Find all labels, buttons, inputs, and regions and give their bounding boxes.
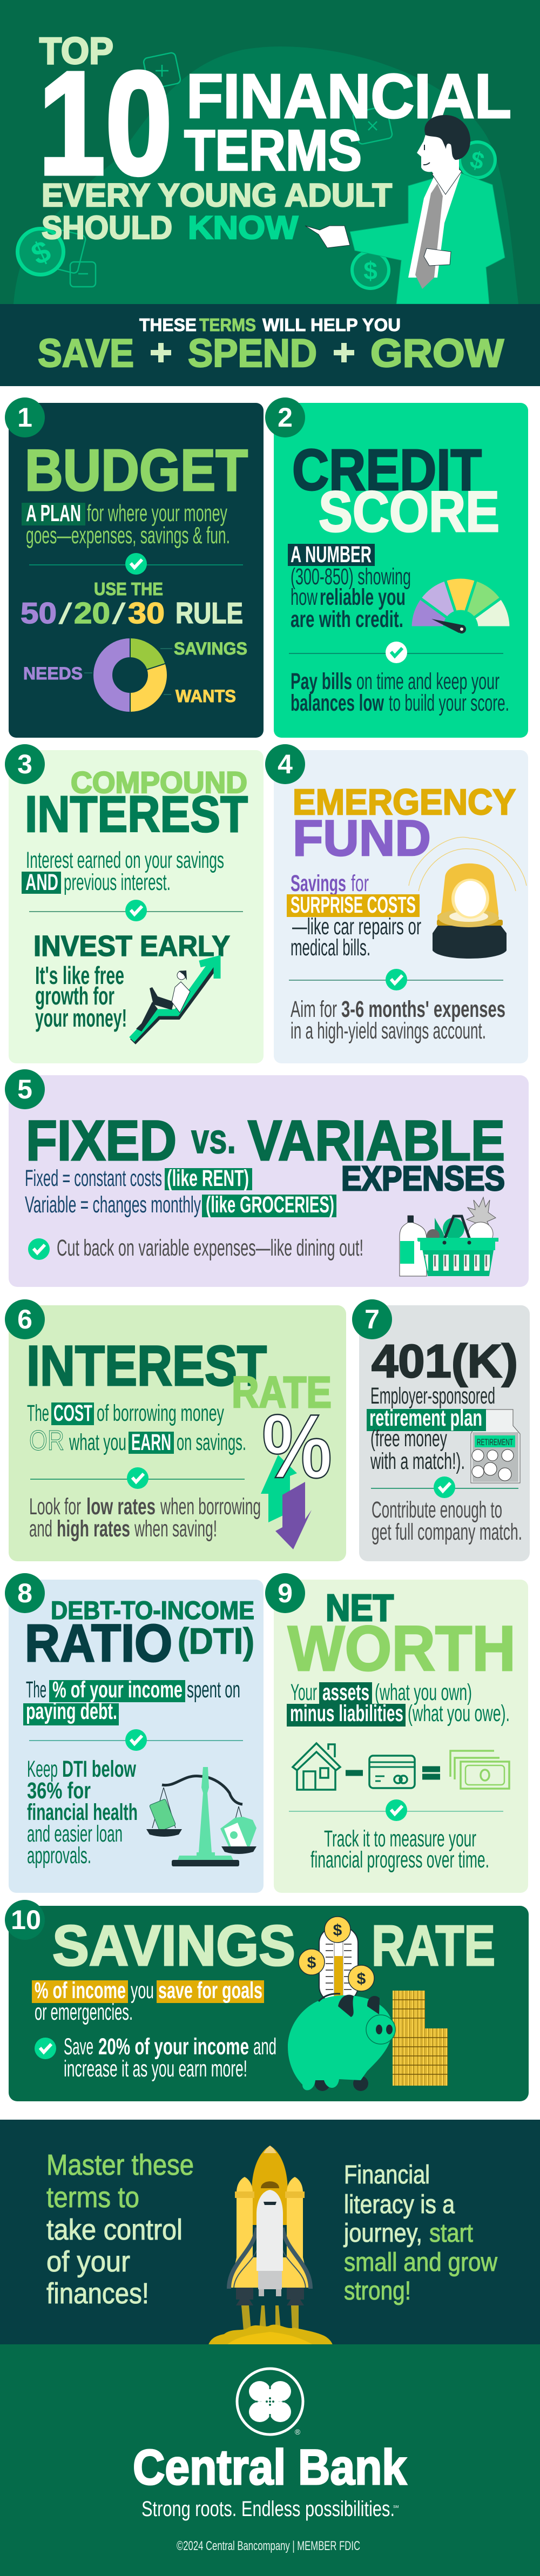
panel 5: fixed vs variable expenses xyxy=(5,1069,529,1287)
badge 10 xyxy=(5,1900,45,1940)
tip xyxy=(64,2034,276,2082)
panel 2: credit score xyxy=(265,397,528,738)
icon: percent with arrows xyxy=(261,1395,332,1549)
icon: dollar coins: $ xyxy=(363,257,377,285)
definitions: Variable = changes monthly xyxy=(25,1192,201,1218)
heading: FUND xyxy=(293,810,431,866)
definition: save for goals xyxy=(158,1978,262,2004)
badge 4 xyxy=(265,744,305,784)
definition: spent on xyxy=(187,1677,240,1703)
heading: FIXED xyxy=(26,1109,177,1172)
credit gauge xyxy=(410,577,511,633)
left message: finances! xyxy=(46,2277,149,2310)
icon: check xyxy=(386,969,407,990)
right message xyxy=(343,2161,497,2305)
invest early text: growth for xyxy=(35,982,114,1010)
definition: retirement plan xyxy=(369,1405,482,1431)
definition: A PLAN xyxy=(26,500,81,527)
tip: approvals. xyxy=(27,1843,91,1869)
icons: house minus card equals money xyxy=(293,1743,509,1790)
illustration: retirement jar xyxy=(471,1410,520,1483)
illustration: emergency siren xyxy=(409,837,526,959)
save spend grow words: SPEND xyxy=(188,332,317,375)
definition xyxy=(23,1677,240,1725)
illustration: thermometer, coins and piggy bank: $ xyxy=(357,1970,366,1988)
badge 6 xyxy=(5,1299,45,1339)
right message: strong! xyxy=(344,2277,411,2305)
tip: 36% for xyxy=(27,1778,91,1804)
definitions: Fixed = constant costs xyxy=(25,1165,162,1191)
heading: EMERGENCY xyxy=(293,782,516,822)
badge 9: 9 xyxy=(278,1578,293,1608)
definition: % of income xyxy=(35,1978,126,2004)
definition: assets xyxy=(322,1680,369,1705)
heading xyxy=(292,437,500,544)
copyright: ©2024 Central Bancompany | MEMBER FDIC xyxy=(177,2539,360,2553)
badge 7 xyxy=(352,1299,392,1339)
hill background shape xyxy=(14,46,518,304)
tip xyxy=(291,996,505,1044)
right message: journey, xyxy=(343,2219,422,2248)
badge 4: 4 xyxy=(278,749,293,779)
definition: A NUMBER xyxy=(291,542,372,568)
definition: for xyxy=(351,871,369,896)
rule heading xyxy=(21,579,243,630)
right message: literacy is a xyxy=(344,2190,455,2219)
tip xyxy=(372,1497,522,1545)
panel 3: compound interest xyxy=(5,744,264,1063)
definition: Interest earned on your savings xyxy=(26,847,224,873)
definition: OR xyxy=(29,1425,64,1456)
panel 4: emergency fund xyxy=(265,744,528,1063)
definition: on savings. xyxy=(177,1429,246,1455)
heading: INTEREST xyxy=(25,786,248,843)
rule heading: 50 xyxy=(21,596,57,630)
save spend grow words: GROW xyxy=(370,332,504,375)
illustration: thermometer, coins and piggy bank: $ xyxy=(333,1921,342,1939)
definition xyxy=(22,847,224,895)
definition xyxy=(27,1400,246,1456)
definition xyxy=(22,500,230,549)
definition: The xyxy=(27,1400,49,1426)
heading: RATE xyxy=(372,1914,495,1978)
heading xyxy=(52,1914,495,1978)
heading: EXPENSES xyxy=(341,1159,505,1198)
definition: how xyxy=(291,584,318,610)
heading: 401(K) xyxy=(372,1336,518,1387)
panel 9: net worth xyxy=(265,1573,528,1893)
badge 7: 7 xyxy=(364,1304,380,1334)
definition: (what you own) xyxy=(375,1680,472,1705)
right message: Financial xyxy=(344,2161,430,2189)
invest early text xyxy=(35,961,127,1032)
badge 6: 6 xyxy=(17,1304,32,1334)
rule heading: RULE xyxy=(176,596,243,630)
definition xyxy=(287,1680,510,1727)
left message: Master these xyxy=(46,2149,194,2181)
icon: dollar coins: $ xyxy=(26,233,56,271)
illustration: businessman pointing xyxy=(305,115,505,304)
footer: Central Bank xyxy=(0,2344,540,2576)
badge 8 xyxy=(5,1573,45,1613)
icon: check xyxy=(127,1467,148,1489)
tip: and xyxy=(253,2034,276,2060)
heading: DEBT-TO-INCOME xyxy=(51,1596,254,1624)
badge 9 xyxy=(265,1573,305,1613)
icon: check xyxy=(35,2038,56,2059)
tip: and easier loan xyxy=(27,1821,123,1847)
tip: financial health xyxy=(27,1799,138,1825)
definitions: (like GROCERIES) xyxy=(206,1192,334,1218)
heading xyxy=(25,765,248,843)
banner: save, spend, grow xyxy=(0,304,540,386)
definition xyxy=(288,542,411,632)
definition: medical bills. xyxy=(291,935,370,961)
definition: (free money xyxy=(370,1426,447,1452)
tip: increase it as you earn more! xyxy=(64,2056,247,2082)
subheading xyxy=(139,315,401,335)
definition: reliable you xyxy=(320,584,406,610)
icon: check xyxy=(125,553,147,575)
definition: of borrowing money xyxy=(97,1400,224,1426)
badge 5: 5 xyxy=(17,1074,32,1104)
definition: with a match!). xyxy=(370,1448,465,1474)
definitions xyxy=(25,1165,336,1218)
donut chart xyxy=(84,638,172,712)
icon: dollar coins: $ xyxy=(467,146,487,175)
icon: check xyxy=(386,642,407,663)
badge 3 xyxy=(5,744,45,784)
subheading: WILL HELP YOU xyxy=(262,315,401,335)
left message: terms to xyxy=(46,2181,139,2214)
heading: CREDIT xyxy=(292,437,482,502)
heading: VARIABLE xyxy=(248,1109,505,1172)
tip: Save xyxy=(64,2034,93,2060)
illustration: person relaxing on rising arrow xyxy=(132,960,217,1042)
rule heading: / xyxy=(58,597,73,630)
rule heading: 30 xyxy=(128,596,165,630)
tip: 20% of your income xyxy=(98,2034,249,2060)
heading: BUDGET xyxy=(25,437,248,503)
tip: DTI below xyxy=(62,1756,136,1782)
panel 10: savings rate xyxy=(5,1900,529,2101)
subheading: THESE xyxy=(139,315,197,335)
heading: RATE xyxy=(232,1368,332,1417)
heading: SAVINGS xyxy=(52,1914,295,1978)
definition: for where your money xyxy=(87,500,227,527)
definition: previous interest. xyxy=(64,869,171,895)
logo: dogwood flower in circle xyxy=(237,2369,303,2436)
illustration: thermometer, coins and piggy bank: $ xyxy=(307,1954,316,1972)
panel 6: interest rate xyxy=(5,1299,346,1561)
definition xyxy=(287,871,421,961)
closing panel xyxy=(0,2120,540,2345)
illustration: retirement jar: RETIREMENT xyxy=(477,1437,513,1447)
icon: check xyxy=(386,1799,407,1821)
heading: RATIO xyxy=(25,1614,172,1673)
definition: —like car repairs or xyxy=(292,914,421,940)
definition: AND xyxy=(25,869,58,895)
subheading: TERMS xyxy=(199,315,256,335)
definition: goes—expenses, savings & fun. xyxy=(26,522,230,549)
left message: of your xyxy=(46,2245,130,2278)
main title: SHOULD xyxy=(42,210,172,246)
heading: vs. xyxy=(191,1115,236,1162)
heading xyxy=(293,782,516,866)
definition: SURPRISE COSTS xyxy=(291,892,416,918)
badge 1 xyxy=(5,397,45,437)
definition: The xyxy=(26,1677,46,1703)
definition: (300-850) showing xyxy=(291,564,411,590)
tip: when borrowing xyxy=(160,1494,261,1520)
tip xyxy=(291,669,509,716)
definition: minus liabilities xyxy=(290,1701,403,1727)
icon: percent with arrows: % xyxy=(262,1395,332,1497)
right message: start xyxy=(429,2219,473,2248)
illustration: rocket launch xyxy=(208,2146,333,2345)
heading: WORTH xyxy=(288,1613,516,1684)
save spend grow words xyxy=(38,332,504,375)
panel 8: debt-to-income ratio xyxy=(5,1573,264,1893)
definitions: (like RENT) xyxy=(167,1165,249,1191)
donut labels: WANTS xyxy=(176,686,236,706)
badge 3: 3 xyxy=(17,749,32,779)
heading: SCORE xyxy=(319,479,500,544)
rule heading: 20 xyxy=(74,596,110,630)
tip: Cut back on variable expenses—like dining out! xyxy=(57,1235,363,1261)
definition: COST xyxy=(53,1400,92,1426)
tagline: SM xyxy=(393,2505,399,2509)
tip xyxy=(29,1494,261,1542)
heading xyxy=(25,1596,254,1673)
definition: Savings xyxy=(291,871,346,896)
definition: Your xyxy=(291,1680,317,1705)
tip: when saving! xyxy=(134,1516,217,1542)
definition xyxy=(32,1978,264,2025)
heading: COMPOUND xyxy=(71,765,247,799)
badge 8: 8 xyxy=(17,1578,32,1608)
save spend grow words: SAVE xyxy=(38,332,134,375)
tip xyxy=(310,1826,489,1873)
donut labels: NEEDS xyxy=(23,664,83,683)
definition: what you xyxy=(69,1429,126,1455)
badge 2: 2 xyxy=(278,402,293,433)
badge 10: 10 xyxy=(11,1905,41,1935)
heading xyxy=(26,1109,505,1198)
badge 1: 1 xyxy=(17,402,32,433)
badge 5 xyxy=(5,1069,45,1109)
tip: and xyxy=(29,1516,52,1542)
icon: check xyxy=(125,1729,147,1751)
main title: TOP xyxy=(39,30,113,72)
invest early text: your money! xyxy=(35,1004,127,1032)
panel 7: 401(k) xyxy=(352,1299,530,1561)
tip: Look for xyxy=(29,1494,81,1520)
header banner xyxy=(0,0,540,304)
definition: or emergencies. xyxy=(35,1999,133,2025)
logo: dogwood flower in circle: ® xyxy=(295,2427,301,2436)
invest early text: It's like free xyxy=(35,961,124,989)
icon: dollar coins xyxy=(16,140,497,290)
donut labels xyxy=(23,639,247,706)
tip: low rates xyxy=(86,1494,156,1520)
invest early heading: INVEST EARLY xyxy=(33,930,230,962)
tip: Aim for xyxy=(291,996,337,1022)
definition: % of your income xyxy=(52,1677,183,1703)
icon: check xyxy=(125,900,147,921)
illustration: thermometer, coins and piggy bank xyxy=(288,1917,448,2091)
tip: high rates xyxy=(57,1516,130,1542)
definition: you xyxy=(131,1978,154,2004)
left message: take control xyxy=(46,2214,183,2246)
definition: paying debt. xyxy=(26,1698,117,1724)
tip: Keep xyxy=(27,1756,58,1782)
left message xyxy=(46,2149,194,2310)
illustration: balance scale xyxy=(146,1767,256,1866)
rule heading: USE THE xyxy=(94,579,163,599)
main title: 10 xyxy=(38,41,172,205)
main title: TERMS xyxy=(184,118,362,183)
tip: balances low xyxy=(291,690,384,716)
heading: INTEREST xyxy=(26,1334,267,1398)
main title: KNOW xyxy=(188,210,298,246)
main title: EVERY YOUNG ADULT xyxy=(42,177,392,213)
icon: check xyxy=(28,1238,50,1260)
main title: FINANCIAL xyxy=(186,61,511,131)
main title xyxy=(38,30,511,246)
definition: EARN xyxy=(131,1429,171,1455)
definition xyxy=(367,1383,495,1474)
heading: (DTI) xyxy=(178,1621,254,1662)
icon: outlined calculator cards xyxy=(50,52,393,287)
tip: Pay bills xyxy=(291,669,352,694)
badge 2 xyxy=(265,397,305,437)
panel 1: budget xyxy=(5,397,264,738)
brand name: Central Bank xyxy=(133,2440,407,2495)
tagline: Strong roots. Endless possibilities. xyxy=(141,2497,395,2521)
heading: NET xyxy=(326,1587,394,1629)
tip xyxy=(27,1756,138,1869)
rule heading: / xyxy=(112,597,126,630)
icon: check xyxy=(434,1476,455,1498)
illustration: grocery basket xyxy=(400,1197,498,1276)
definition: are with credit. xyxy=(291,606,403,632)
right message: small and grow xyxy=(344,2248,497,2277)
donut labels: SAVINGS xyxy=(174,639,247,658)
